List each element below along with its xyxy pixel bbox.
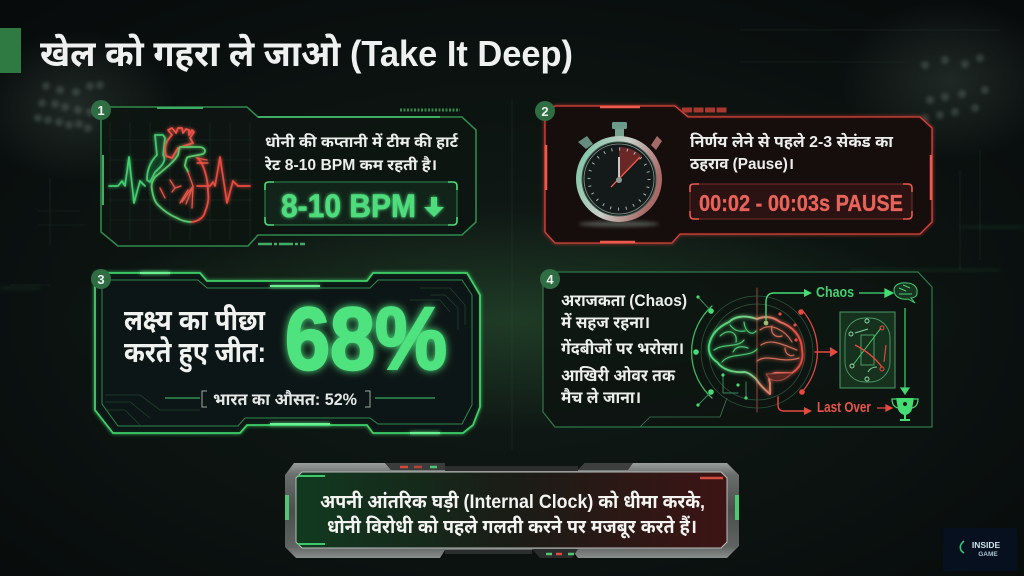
panel 3 label: लक्ष्य का पीछा — [124, 304, 265, 337]
BPM readout — [265, 182, 457, 225]
panel 2 description: ठहराव (Pause)। — [690, 156, 794, 173]
icon: anatomical heart with ECG — [109, 128, 250, 222]
badge 2: 2 — [541, 104, 549, 119]
icon: stopwatch — [576, 122, 662, 227]
icon: trophy — [892, 398, 918, 421]
panel 1: heart rate — [91, 100, 476, 246]
big number: 68% — [285, 289, 447, 388]
callout text: धोनी विरोधी को पहले गलती करने पर मजबूर करते हैं। — [327, 515, 697, 539]
BPM readout: 8-10 BPM — [281, 188, 416, 224]
panel 4 text: मैच ले जाना। — [561, 386, 641, 407]
panel 3: 68% stat — [91, 269, 480, 433]
badge 3: 3 — [97, 272, 105, 287]
panel 1 frame — [101, 107, 476, 246]
average line — [165, 389, 435, 409]
badge 4: 4 — [546, 272, 554, 287]
title: खेल को गहरा ले जाओ (Take It Deep) — [40, 32, 573, 74]
panel 4: brain — [540, 269, 932, 427]
panel 1 description: धोनी की कप्तानी में टीम की हार्ट — [265, 133, 459, 151]
panel 3 frame — [95, 273, 480, 433]
arrow down to trophy — [901, 308, 909, 394]
callout text: अपनी आंतरिक घड़ी (Internal Clock) को धीमा करके, — [320, 490, 705, 513]
panel 4 text: गेंदबीजों पर भरोसा। — [561, 338, 684, 358]
panel 3 label: करते हुए जीत: — [124, 335, 266, 373]
panel 4 text: में सहज रहना। — [561, 312, 650, 332]
icon: down arrow — [424, 197, 444, 217]
bottom callout panel — [285, 463, 739, 558]
panel 4 text — [561, 291, 687, 407]
arrow head green — [804, 289, 812, 297]
panel 1 description — [265, 133, 459, 174]
average line: भारत का औसत: 52% — [213, 389, 357, 409]
chaos arrow — [859, 289, 893, 297]
icon: brain with circuit rings — [692, 288, 832, 412]
metal frame — [285, 463, 739, 558]
watermark logo — [943, 528, 1017, 571]
icon: small brain — [894, 283, 917, 303]
title bar accent — [0, 28, 21, 73]
inner gradient panel — [296, 472, 727, 548]
panel 3 label — [124, 304, 266, 373]
badge 4 — [540, 269, 560, 289]
badge 1: 1 — [97, 103, 105, 118]
last over label: Last Over — [817, 400, 871, 416]
panel 2 frame — [545, 106, 932, 243]
arrow heads red — [804, 347, 838, 415]
pause readout: 00:02 - 00:03s PAUSE — [699, 190, 903, 216]
panel 2: pause — [535, 101, 932, 243]
pitch diagram — [840, 312, 895, 388]
pause readout — [690, 184, 912, 219]
badge 2 — [535, 101, 555, 121]
status lights — [400, 467, 574, 554]
panel 4 text: आखिरी ओवर तक — [561, 365, 676, 385]
watermark logo: INSIDE — [972, 540, 1000, 550]
callout text — [320, 490, 705, 539]
badge 3 — [91, 269, 111, 289]
panel 2 description: निर्णय लेने से पहले 2-3 सेकंड का — [690, 132, 893, 151]
panel 2 description — [690, 132, 893, 173]
last over arrow — [877, 405, 892, 411]
heart grid — [110, 122, 252, 240]
watermark logo: GAME — [978, 551, 998, 558]
panel 4 text: अराजकता (Chaos) — [561, 291, 687, 310]
badge 1 — [91, 100, 111, 120]
chaos label: Chaos — [816, 285, 854, 301]
panel 4 frame — [543, 272, 932, 427]
panel 1 description: रेट 8-10 BPM कम रहती है। — [265, 155, 437, 174]
